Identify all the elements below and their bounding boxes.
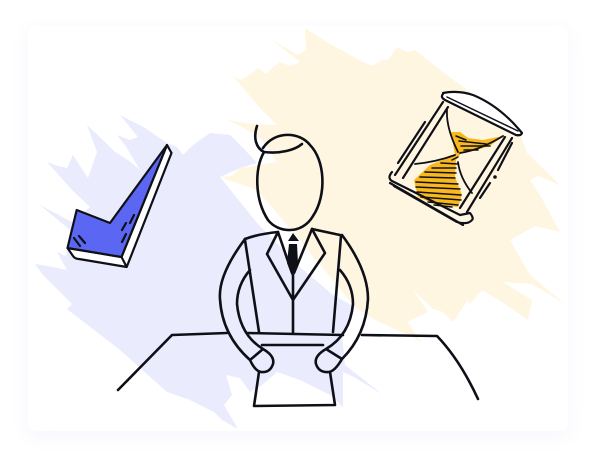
left arm xyxy=(220,239,273,372)
hourglass top rim xyxy=(442,92,522,135)
sand hatching xyxy=(416,136,490,207)
checkmark front face xyxy=(68,145,167,257)
paper on desk xyxy=(254,345,335,406)
jacket shoulders xyxy=(245,229,340,239)
hourglass columns xyxy=(395,102,512,212)
hair xyxy=(255,126,302,153)
desk xyxy=(118,333,478,399)
head xyxy=(257,135,322,230)
tie xyxy=(287,233,299,276)
sketch lines xyxy=(390,122,512,225)
right arm xyxy=(316,235,368,372)
hourglass base xyxy=(390,172,473,223)
yellow brush stroke background xyxy=(220,28,565,342)
glass outline xyxy=(415,110,503,193)
hourglass sand xyxy=(414,132,503,207)
blue brush stroke background xyxy=(35,115,382,429)
lapels xyxy=(267,229,325,333)
icon: checkmark xyxy=(68,145,172,267)
checkmark side face xyxy=(68,145,172,267)
panel: white card xyxy=(28,26,568,431)
figure: businessman xyxy=(220,126,368,372)
icon: hourglass xyxy=(390,92,522,225)
